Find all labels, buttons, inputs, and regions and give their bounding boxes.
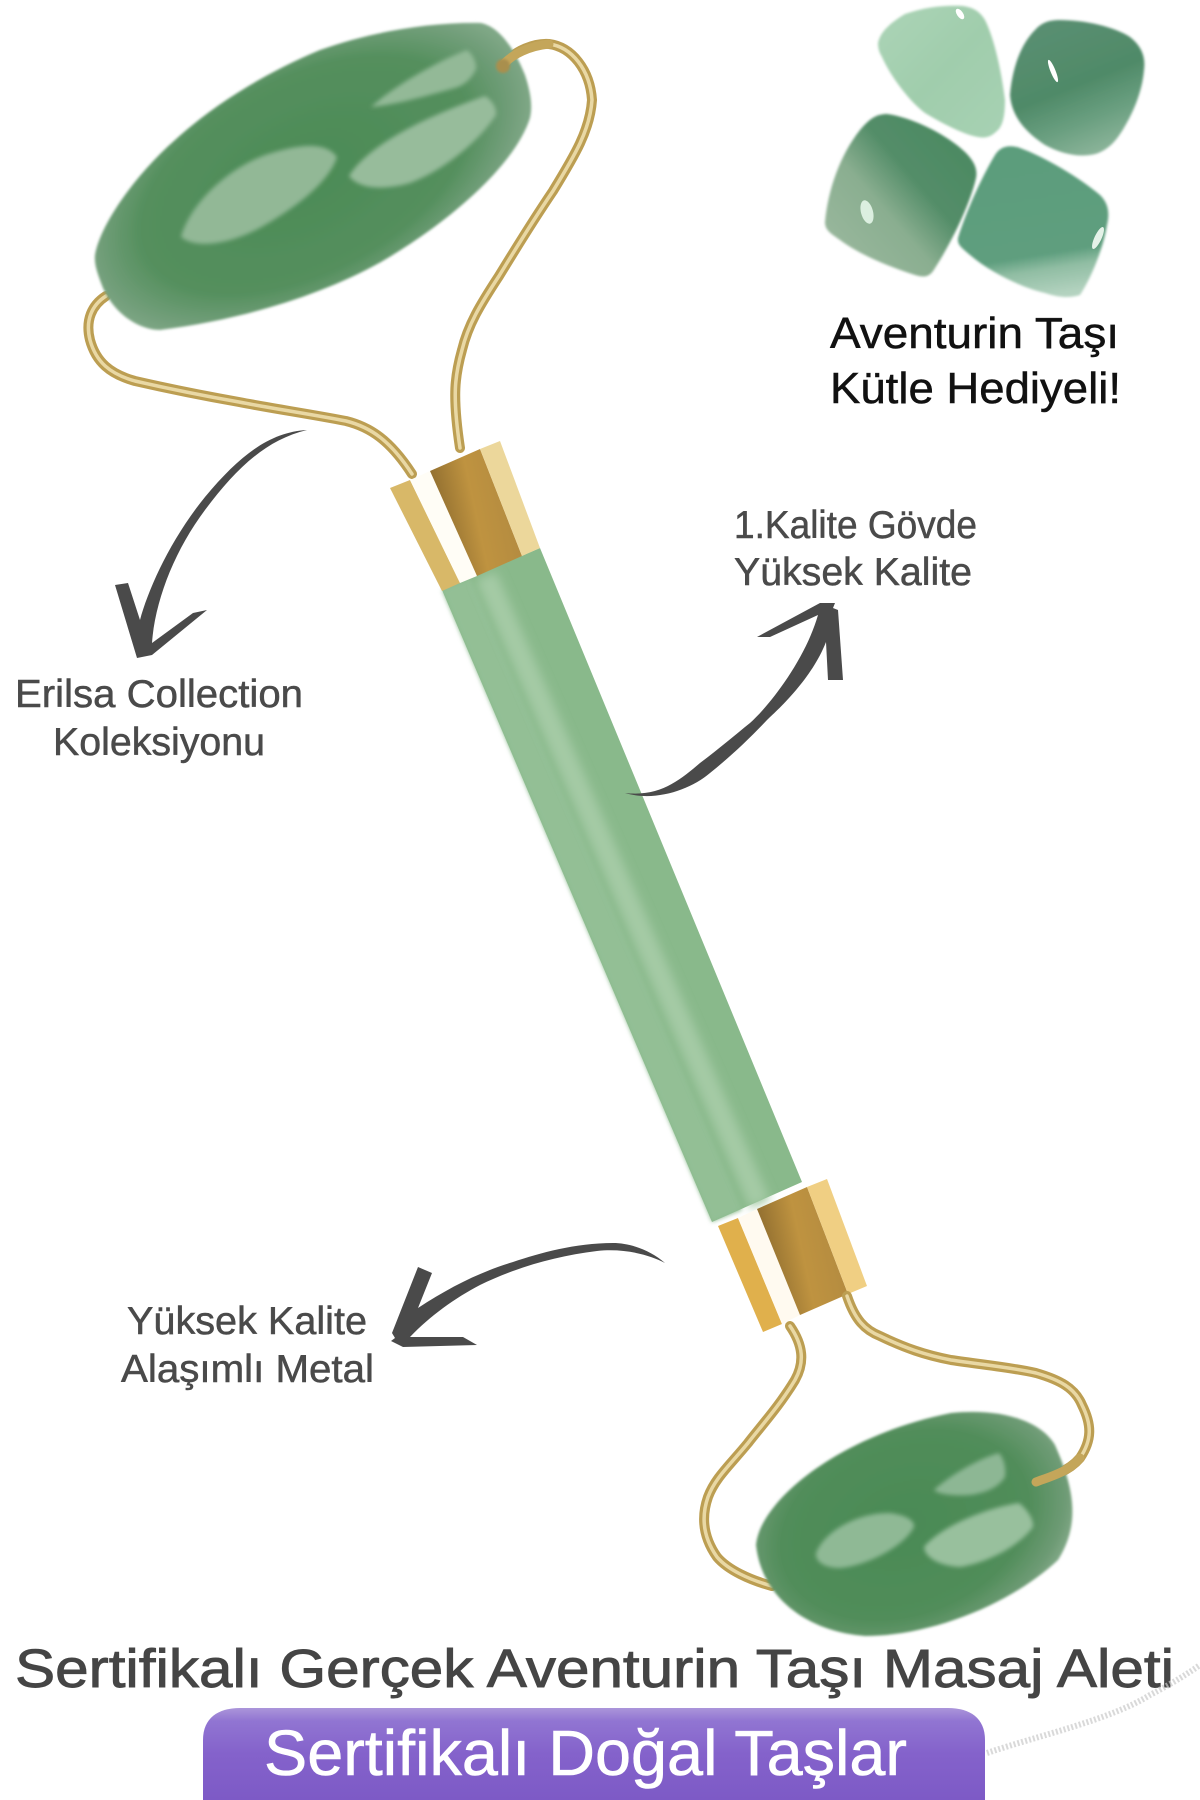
label: Yüksek Kalite Alaşımlı Metal: Yüksek Kalite (127, 1300, 367, 1343)
lower roller frame wire (704, 1296, 1089, 1586)
badge: Sertifikalı Doğal Taşlar (203, 1708, 985, 1800)
stone: lower right (958, 146, 1108, 297)
label: Erilsa Collection (15, 673, 303, 764)
title: Sertifikalı Gerçek Aventurin Taşı Masaj Aleti (15, 1639, 1174, 1699)
label: Yüksek Kalite Alaşımlı Metal: Alaşımlı Metal (121, 1348, 374, 1391)
arrow: handle to quality label (625, 603, 843, 796)
lower metal collar (718, 1179, 867, 1332)
gift caption: Aventurin Taşı (830, 309, 1119, 358)
stone: dark right (1010, 20, 1144, 156)
stone: light top (878, 6, 1005, 137)
label: Yüksek Kalite Alaşımlı Metal (121, 1300, 374, 1391)
arrow: to Erilsa Collection label (115, 430, 307, 658)
label: 1.Kalite Gövde: 1.Kalite Gövde (734, 504, 977, 547)
label: 1.Kalite Gövde (734, 504, 977, 594)
label: Erilsa Collection: Erilsa Collection (15, 673, 303, 716)
label: Erilsa Collection: Koleksiyonu (53, 721, 265, 764)
gift caption: Kütle Hediyeli! (830, 364, 1121, 413)
upper roller frame wire (88, 44, 592, 474)
badge: Sertifikalı Doğal Taşlar: Sertifikalı Doğal Taşlar (264, 1717, 907, 1789)
decorative speckle trace (987, 1665, 1200, 1753)
upper roller stone (95, 23, 549, 330)
stone: left (825, 114, 976, 277)
handle (442, 548, 802, 1222)
gift caption (830, 309, 1121, 413)
label: 1.Kalite Gövde: Yüksek Kalite (734, 551, 972, 594)
arrow: collar to metal label (391, 1243, 665, 1347)
lower roller stone (756, 1412, 1080, 1636)
gift aventurine stones (825, 6, 1144, 297)
upper metal collar (390, 441, 540, 591)
